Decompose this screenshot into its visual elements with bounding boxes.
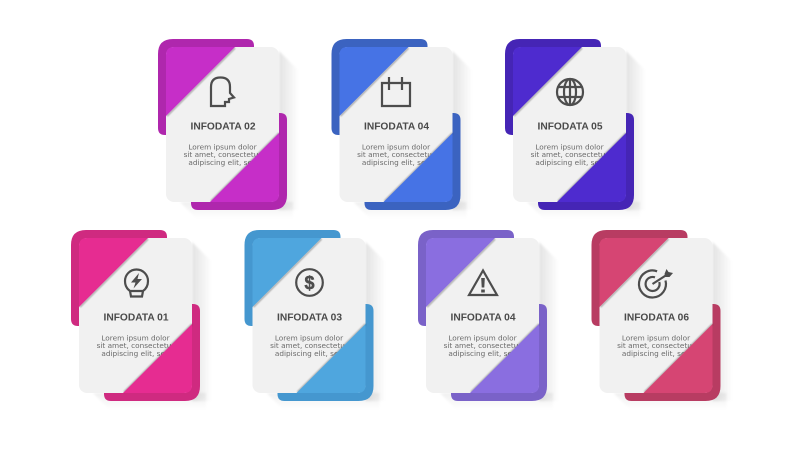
- shadow: [266, 242, 386, 410]
- diagonal shadows: [254, 239, 366, 392]
- body text: sit amet, consectetur: [97, 341, 174, 350]
- icon: warning: [469, 270, 497, 295]
- diagonal shadows: [80, 239, 192, 392]
- color corner top: [340, 47, 408, 116]
- color corner bottom: [384, 133, 452, 202]
- shadow: [527, 51, 646, 219]
- diagonal shadows: [340, 48, 452, 201]
- icon: calendar: [382, 77, 410, 106]
- back tab top-left: [71, 230, 167, 326]
- body text: Lorem ipsum dolor: [275, 333, 343, 342]
- back tab bottom-right: [364, 113, 460, 210]
- back tab bottom-right: [191, 113, 287, 210]
- back tab top-left: [592, 230, 688, 326]
- back tab bottom-right: [278, 304, 374, 401]
- color corner bottom: [210, 133, 279, 202]
- color corner bottom: [123, 324, 192, 393]
- icon: dollar: $: [304, 273, 315, 293]
- color corner bottom: [557, 133, 626, 202]
- card: Infodata 04 blue: [332, 39, 472, 219]
- heading: INFODATA 01: [104, 312, 169, 323]
- back tab top-left: [244, 230, 340, 326]
- body text: Lorem ipsum dolor: [535, 142, 604, 151]
- diagonal shadows: [167, 48, 279, 201]
- icon: dollar: [296, 269, 323, 296]
- shadow: [614, 242, 732, 410]
- body text: Lorem ipsum dolor: [448, 333, 517, 342]
- diagonal shadows: [600, 239, 712, 392]
- back tab top-left: [505, 39, 601, 135]
- white card: [340, 47, 452, 202]
- body text: adipiscing elit, sed: [535, 158, 604, 167]
- white card: [166, 47, 279, 202]
- heading: INFODATA 05: [538, 121, 603, 132]
- color corner top: [600, 238, 668, 307]
- body text: adipiscing elit, sed: [275, 349, 343, 358]
- color corner top: [426, 238, 495, 307]
- diagonal shadows: [427, 239, 539, 392]
- back tab bottom-right: [624, 304, 720, 401]
- color corner top: [166, 47, 235, 116]
- card: Infodata 04 purple: [418, 230, 559, 410]
- color corner bottom: [470, 324, 539, 393]
- color corner top: [513, 47, 582, 116]
- white card: [426, 238, 539, 393]
- back tab bottom-right: [104, 304, 200, 401]
- heading: INFODATA 04: [364, 121, 429, 132]
- white card: [79, 238, 192, 393]
- body text: Lorem ipsum dolor: [101, 333, 170, 342]
- heading: INFODATA 02: [190, 121, 256, 132]
- card: Infodata 03: [244, 230, 386, 410]
- body text: sit amet, consectetur: [184, 150, 261, 159]
- back tab top-left: [332, 39, 428, 135]
- diagonal shadows: [514, 48, 626, 201]
- color corner bottom: [296, 324, 366, 393]
- back tab bottom-right: [538, 113, 634, 210]
- white card: [513, 47, 626, 202]
- color corner top: [79, 238, 148, 307]
- body text: Lorem ipsum dolor: [362, 142, 430, 151]
- shadow: [180, 51, 299, 219]
- shadow: [440, 242, 559, 410]
- heading: INFODATA 03: [277, 312, 342, 323]
- white card: [252, 238, 366, 393]
- body text: adipiscing elit, sed: [188, 158, 257, 167]
- heading: INFODATA 04: [450, 312, 516, 323]
- body text: sit amet, consectetur: [617, 341, 695, 350]
- icon: globe: [557, 79, 583, 105]
- back tab top-left: [418, 230, 514, 326]
- icon: light bulb: [125, 270, 148, 296]
- body text: adipiscing elit, sed: [101, 349, 170, 358]
- body text: sit amet, consectetur: [357, 150, 435, 159]
- card: Infodata 06: [592, 230, 732, 410]
- shadow: [93, 242, 212, 410]
- body text: sit amet, consectetur: [531, 150, 608, 159]
- card: Infodata 05: [505, 39, 646, 219]
- card: Infodata 02: [158, 39, 299, 219]
- white card: [600, 238, 712, 393]
- body text: sit amet, consectetur: [444, 341, 521, 350]
- card: Infodata 01: [71, 230, 212, 410]
- shadow: [354, 51, 472, 219]
- heading: INFODATA 06: [624, 312, 689, 323]
- body text: sit amet, consectetur: [270, 341, 348, 350]
- color corner bottom: [644, 324, 712, 393]
- body text: adipiscing elit, sed: [448, 349, 517, 358]
- body text: Lorem ipsum dolor: [622, 333, 690, 342]
- icon: target: [639, 269, 673, 297]
- back tab bottom-right: [451, 304, 547, 401]
- back tab top-left: [158, 39, 254, 135]
- body text: Lorem ipsum dolor: [188, 142, 257, 151]
- body text: adipiscing elit, sed: [622, 349, 690, 358]
- icon: head: [211, 78, 234, 106]
- color corner top: [252, 238, 322, 307]
- body text: adipiscing elit, sed: [362, 158, 430, 167]
